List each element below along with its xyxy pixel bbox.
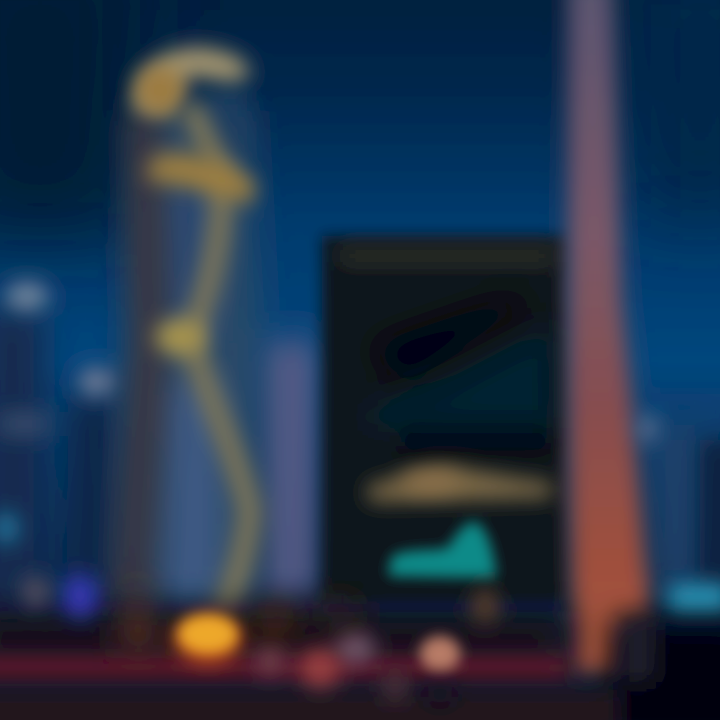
yellow glow xyxy=(174,616,242,664)
panel area chart xyxy=(360,325,556,428)
panel heading bar xyxy=(340,248,554,264)
cyan light right xyxy=(668,584,720,614)
right background buildings xyxy=(638,413,720,590)
red street band xyxy=(0,656,570,680)
tower gold ribbon xyxy=(188,105,250,615)
tower body xyxy=(118,110,262,600)
panel teal chart xyxy=(388,522,496,578)
pale building behind panel xyxy=(262,340,316,598)
pink spire xyxy=(568,0,650,672)
tower gold knot xyxy=(155,319,205,355)
ground xyxy=(0,690,620,720)
crown warm core xyxy=(136,66,184,114)
panel dark hollow xyxy=(370,300,540,385)
dark data panel xyxy=(322,236,566,600)
panel gold band xyxy=(368,466,552,502)
tower dark left flank xyxy=(130,110,150,600)
left background buildings xyxy=(0,282,120,615)
tower gold crown xyxy=(135,48,249,116)
golden tower xyxy=(118,48,262,615)
tower gold collar xyxy=(152,158,250,198)
street level xyxy=(0,574,720,720)
purple light xyxy=(61,574,99,618)
crowd lights xyxy=(335,632,375,664)
panel gold band highlight xyxy=(400,471,460,491)
